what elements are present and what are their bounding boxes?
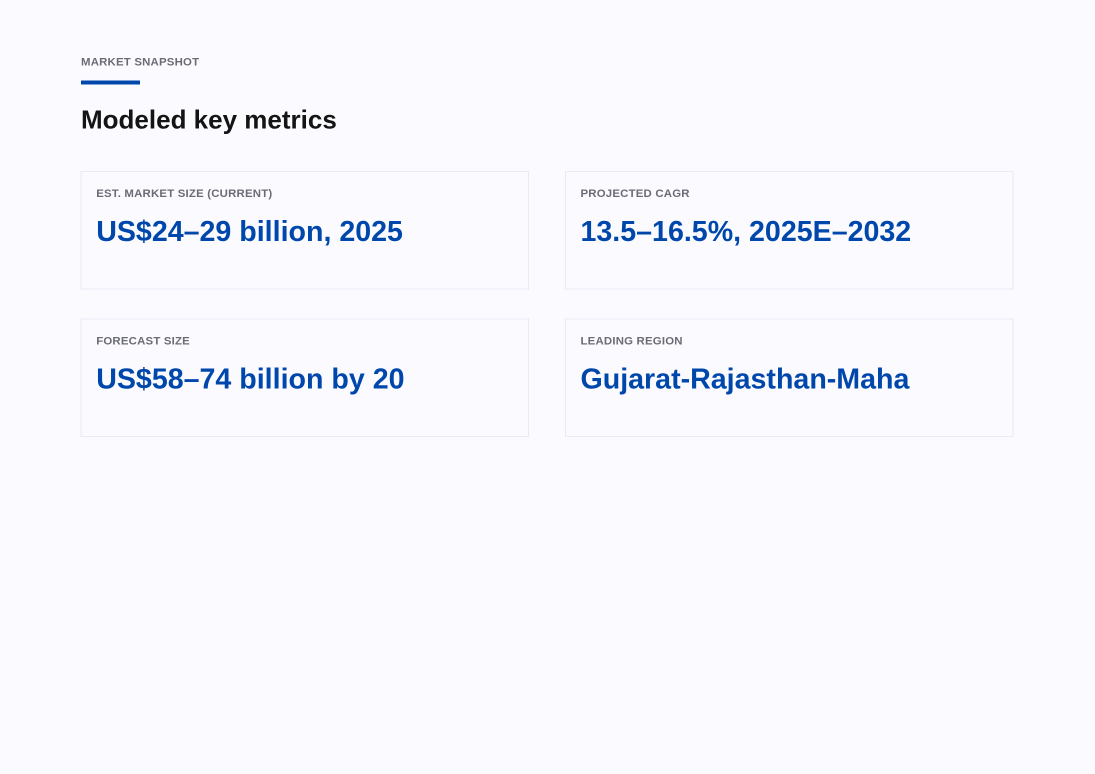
value: market size: US$24–29 billion, 2025 <box>96 215 403 247</box>
eyebrow: market snapshot: MARKET SNAPSHOT <box>81 55 199 68</box>
label: projected CAGR: PROJECTED CAGR <box>580 186 690 199</box>
panel: est. market size <box>81 171 529 290</box>
value: forecast: US$58–74 billion by 20 <box>96 363 405 395</box>
value: region: Gujarat-Rajasthan-Maha <box>580 363 909 395</box>
label: est. market size: EST. MARKET SIZE (CURRENT) <box>96 186 272 199</box>
panel: projected CAGR <box>565 171 1014 290</box>
accent rule under eyebrow <box>81 80 140 84</box>
panel: forecast size <box>81 318 529 437</box>
panel: leading region <box>565 318 1014 437</box>
title: Modeled key metrics <box>81 106 337 134</box>
value: CAGR: 13.5–16.5%, 2025E–2032 <box>580 215 911 247</box>
label: forecast size: FORECAST SIZE <box>96 334 190 347</box>
label: leading region: LEADING REGION <box>580 334 683 347</box>
